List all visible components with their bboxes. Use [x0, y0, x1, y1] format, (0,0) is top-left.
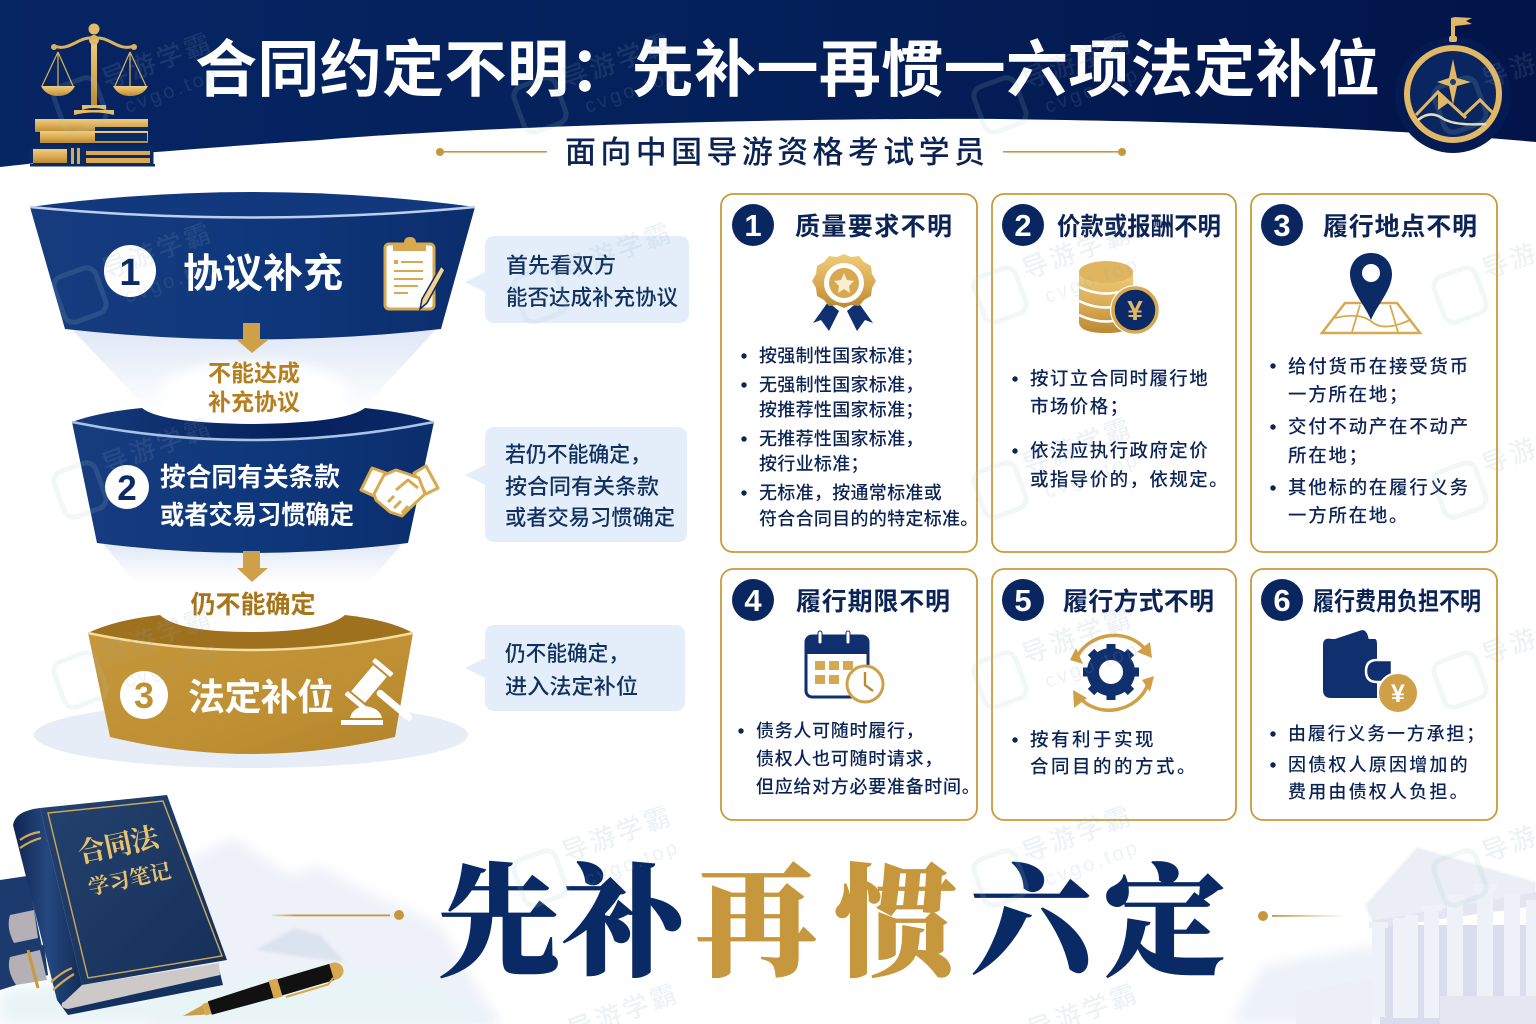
- title: 合同约定不明：先补一再惯一六项法定补位: [195, 36, 1380, 105]
- text: 导游学霸: [1018, 27, 1137, 95]
- card 1 list: 按推荐性国家标准；: [759, 400, 924, 420]
- heading: 质量要求不明: [795, 213, 952, 241]
- heading: 履行地点不明: [1323, 213, 1477, 241]
- tier 2 label: 或者交易习惯确定: [160, 500, 354, 530]
- temple illustration: [1296, 847, 1536, 1024]
- text: 导游学霸: [98, 412, 217, 480]
- card 3: 履行地点不明: [1251, 194, 1497, 552]
- card 2 list: 市场价格；: [1030, 396, 1130, 417]
- number 4: [732, 579, 774, 621]
- card 4: 履行期限不明: [721, 569, 980, 820]
- tier 3 label: 法定补位: [188, 677, 334, 718]
- card 6 list: [1270, 724, 1486, 802]
- book title: [75, 821, 173, 900]
- number 6: [1261, 579, 1303, 621]
- front cover: [40, 795, 227, 985]
- callout 2: 若仍不能确定，: [505, 443, 651, 467]
- number badge 2: 2: [117, 469, 137, 508]
- number 1: [732, 204, 774, 246]
- icon: fountain pen: [180, 959, 346, 1024]
- connector label 1: 不能达成: [208, 360, 300, 386]
- callout 3: 进入法定补位: [505, 675, 638, 699]
- text: cvgo.top: [1042, 836, 1143, 891]
- card 1 list: 无强制性国家标准，: [759, 375, 924, 395]
- icon: law notebook stack: [0, 795, 227, 1015]
- icon: wallet with yen coin: [1323, 630, 1418, 713]
- number 5: [1002, 579, 1044, 621]
- text: cvgo.top: [1042, 638, 1143, 693]
- text: cvgo.top: [122, 253, 223, 308]
- callout 2: 或者交易习惯确定: [505, 506, 675, 530]
- slogan: 先补再惯六定: 再惯: [695, 858, 958, 993]
- card 2 list: 依法应执行政府定价: [1030, 440, 1209, 461]
- text: cvgo.top: [1042, 63, 1143, 118]
- book title: 合同法: [75, 821, 164, 870]
- card 1 list: 按行业标准；: [759, 454, 869, 474]
- slogan: 先补再惯六定: 六定: [970, 858, 1226, 993]
- card 3 list: 其他标的在履行义务: [1288, 477, 1470, 498]
- down arrow 1: [237, 323, 268, 353]
- text: 导游学霸: [1018, 800, 1137, 868]
- spine: [13, 808, 82, 1002]
- number badge 3: [120, 671, 168, 719]
- card 3 list: 给付货币在接受货币: [1288, 356, 1470, 377]
- text: 导游学霸: [558, 800, 677, 868]
- icon: coins and yen: ¥: [1127, 295, 1143, 326]
- callout 3: [465, 625, 685, 711]
- text: 导游学霸: [1018, 412, 1137, 480]
- card 1: 质量要求不明: [721, 194, 979, 552]
- card 6: 履行费用负担不明: [1251, 569, 1497, 820]
- subtitle: 面向中国导游资格考试学员: [565, 135, 985, 170]
- card 3 list: 交付不动产在不动产: [1288, 416, 1470, 437]
- card 2 list: 按订立合同时履行地: [1030, 368, 1209, 389]
- card 5: 履行方式不明: [992, 569, 1236, 820]
- number 4: 4: [744, 583, 762, 618]
- card 4 list: 债务人可随时履行，: [756, 721, 924, 741]
- funnel platform shadow: [34, 702, 468, 768]
- number badge 1: 1: [119, 252, 141, 294]
- card 1 list: 无标准，按通常标准或: [759, 483, 942, 503]
- text: 导游学霸: [558, 27, 677, 95]
- card 3 list: 一方所在地。: [1288, 505, 1409, 526]
- heading: 履行费用负担不明: [1313, 588, 1481, 616]
- card 3 list: [1270, 356, 1470, 526]
- background mist mountains: [0, 837, 1536, 1024]
- tier 2 label: [160, 462, 354, 530]
- card 1 list: 无推荐性国家标准，: [759, 429, 924, 449]
- tier 1 label: 协议补充: [183, 252, 343, 296]
- icon: wallet with yen coin: ¥: [1391, 680, 1405, 708]
- number 5: 5: [1014, 583, 1032, 618]
- icon: compass with mountain and flag: [1395, 17, 1511, 153]
- number badge 3: 3: [134, 675, 154, 716]
- icon: location pin on map: [1322, 253, 1420, 333]
- icon: coins and yen: [1079, 261, 1160, 335]
- card 5 list: [1012, 729, 1198, 777]
- card 6 list: 费用由债权人负担。: [1288, 782, 1470, 802]
- connector label 2: 仍不能确定: [190, 591, 316, 619]
- card 1 list: 按强制性国家标准；: [759, 346, 924, 366]
- subtitle: [436, 135, 1126, 170]
- back books: [0, 876, 48, 990]
- text: cvgo.top: [1042, 253, 1143, 308]
- card 3 list: 一方所在地；: [1288, 384, 1409, 405]
- card 2 list: [1012, 368, 1229, 490]
- callout 2: [465, 427, 687, 542]
- card 1 list: 符合合同目的的特定标准。: [759, 509, 979, 529]
- number badge 1: [104, 245, 156, 297]
- icon: gavel: [341, 658, 427, 738]
- heading: 履行期限不明: [796, 588, 950, 616]
- card 4 list: 但应给对方必要准备时间。: [756, 776, 980, 797]
- funnel tier 1: 协议补充: [30, 192, 475, 422]
- back cover and pages: [57, 965, 223, 1015]
- connector label 1: [208, 360, 300, 415]
- text: 导游学霸: [98, 602, 217, 670]
- text: cvgo.top: [122, 638, 223, 693]
- card 6 list: 因债权人原因增加的: [1288, 755, 1470, 775]
- tier 2 label: 按合同有关条款: [160, 462, 340, 492]
- number 6: 6: [1273, 583, 1291, 618]
- book title: 学习笔记: [86, 859, 173, 900]
- card 6 list: 由履行义务一方承担；: [1288, 724, 1486, 744]
- card 1 list: [741, 346, 979, 529]
- down arrow 2: [237, 551, 268, 582]
- icon: medal: [812, 254, 876, 331]
- number 2: [1002, 204, 1044, 246]
- text: cvgo.top: [1042, 448, 1143, 503]
- card 2 list: 或指导价的，依规定。: [1030, 469, 1229, 490]
- text: 导游学霸: [1018, 217, 1137, 285]
- text: cvgo.top: [122, 63, 223, 118]
- text: cvgo.top: [582, 836, 683, 891]
- header band: [0, 0, 1536, 167]
- card 4 list: 债权人也可随时请求，: [756, 749, 943, 769]
- number 2: 2: [1014, 208, 1032, 243]
- funnel tier 3: 法定补位: [88, 615, 427, 754]
- heading: 价款或报酬不明: [1057, 213, 1221, 241]
- card 5 list: 合同目的的方式。: [1030, 756, 1198, 777]
- slogan: 先补再惯六定: [272, 858, 1345, 993]
- text: 导游学霸: [558, 217, 677, 285]
- slogan: 先补再惯六定: 先补: [438, 858, 694, 993]
- connector label 1: 补充协议: [208, 389, 300, 415]
- callout 3: 仍不能确定，: [505, 642, 629, 666]
- text: 导游学霸: [98, 27, 217, 95]
- callout 1: [465, 236, 689, 323]
- card 2: 价款或报酬不明: [992, 194, 1236, 552]
- number 1: 1: [744, 208, 762, 243]
- callout 1: 能否达成补充协议: [506, 286, 678, 310]
- icon: clipboard and pen: [385, 237, 445, 309]
- icon: calendar and clock: [806, 631, 883, 702]
- text: cvgo.top: [582, 63, 683, 118]
- card 4 list: [738, 721, 980, 797]
- callout 1: 首先看双方: [506, 254, 616, 278]
- heading: 履行方式不明: [1063, 587, 1214, 616]
- icon: handshake: [361, 466, 438, 516]
- number badge 2: [105, 465, 149, 509]
- callout 2: 按合同有关条款: [505, 475, 659, 499]
- card 5 list: 按有利于实现: [1030, 729, 1156, 750]
- number 3: 3: [1273, 208, 1291, 243]
- text: 导游学霸: [98, 217, 217, 285]
- icon: scales and books: [30, 24, 155, 166]
- icon: gear with cycle arrows: [1070, 635, 1154, 710]
- text: 导游学霸: [1018, 602, 1137, 670]
- card 3 list: 所在地；: [1288, 445, 1369, 466]
- funnel tier 2: 按合同有关条款: [72, 408, 438, 582]
- number 3: [1261, 204, 1303, 246]
